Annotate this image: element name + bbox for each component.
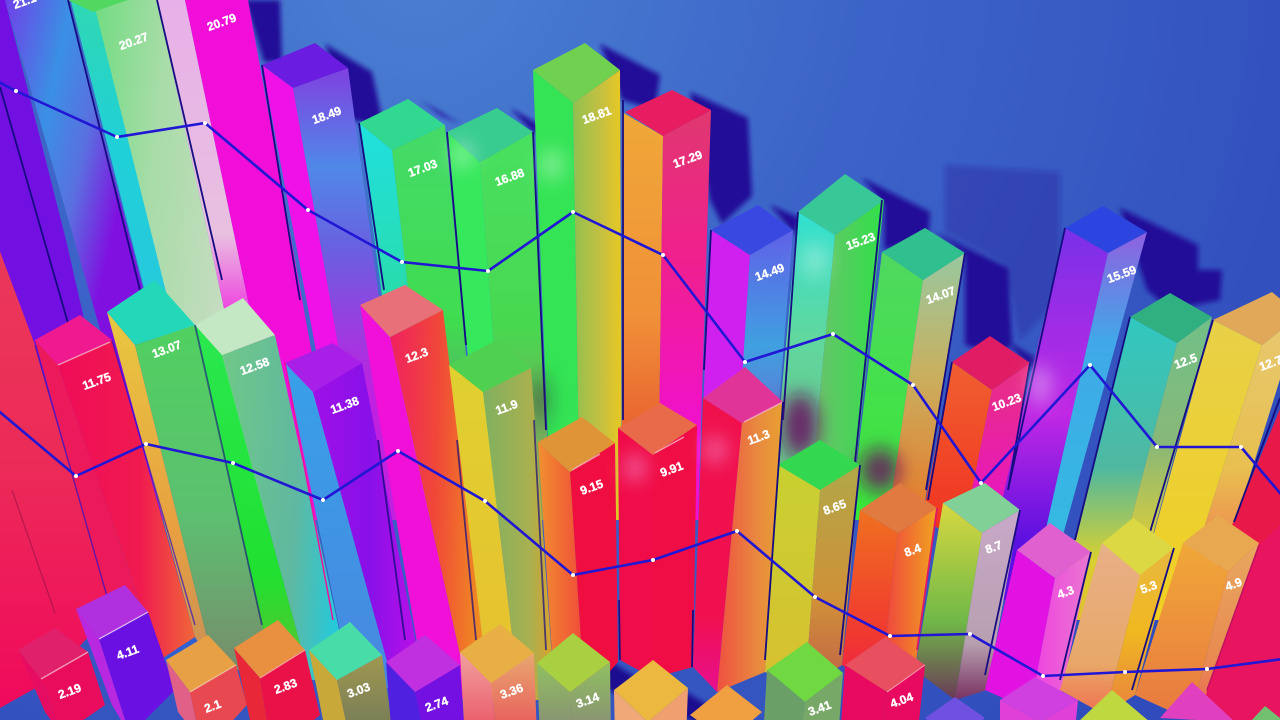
value label: 17.29	[671, 147, 704, 171]
bar 8.65	[765, 402, 860, 690]
bar 5.3	[1060, 518, 1174, 715]
value label: 15.59	[1105, 262, 1138, 286]
value label: 15.23	[844, 229, 877, 253]
value label: 5.3	[1138, 578, 1159, 597]
value label: 20.79	[205, 10, 238, 34]
value label: 4.04	[888, 690, 915, 711]
bar 8.7	[915, 483, 1020, 700]
bar 4.9	[1132, 515, 1259, 720]
bar 15.59	[979, 206, 1147, 600]
bar far right	[1200, 385, 1280, 620]
value label: 4.9	[1223, 575, 1244, 594]
front row of bars	[18, 585, 1280, 720]
value label: 11.75	[80, 370, 113, 393]
bar 3.14	[537, 633, 611, 720]
value label: 16.88	[493, 165, 526, 189]
bar lime small	[1078, 690, 1150, 720]
value label: 2.74	[423, 694, 450, 715]
bar 2.74	[386, 635, 465, 720]
value label: 3.14	[574, 690, 601, 711]
bar far right lower	[1200, 515, 1280, 720]
value label: 11.9	[494, 397, 520, 418]
value label: 18.81	[580, 103, 613, 127]
value label: 13.07	[150, 337, 183, 361]
value label: 3.36	[498, 681, 525, 702]
bar 11.38	[285, 343, 425, 690]
value label: 11.38	[328, 394, 361, 417]
value label: 4.3	[1055, 583, 1076, 602]
bar 18.49	[262, 43, 409, 520]
bar pink small	[1160, 682, 1235, 720]
bar 13.07	[107, 280, 272, 670]
bar 20.27	[68, 0, 270, 520]
bar 10.23	[922, 253, 1030, 540]
bar unlabelled orange	[614, 660, 688, 720]
far-left background bars	[0, 0, 130, 520]
bar left edge	[0, 225, 112, 715]
bar violet small	[925, 697, 985, 720]
value label: 2.83	[272, 676, 299, 697]
lower trend line	[0, 408, 1280, 678]
value label: 14.49	[753, 260, 786, 284]
value label: 9.91	[658, 459, 685, 480]
soft shadows and glows on back row	[450, 141, 1052, 492]
bar 2.83	[234, 620, 320, 720]
bar 14.07	[850, 200, 965, 520]
bar 4.11	[76, 585, 175, 720]
value label: 2.1	[202, 697, 223, 716]
bar 11.75	[35, 315, 198, 665]
bar 4.3	[985, 510, 1091, 710]
bar 2.19	[18, 628, 105, 720]
value label: 20.27	[117, 29, 150, 53]
bar 12.58	[195, 298, 350, 680]
bar 9.91	[618, 403, 697, 678]
middle row of bars	[0, 225, 1280, 720]
bar 17.03	[359, 99, 481, 520]
value label: 12.58	[238, 354, 271, 378]
bar magenta small	[1000, 677, 1078, 720]
bar 4.04	[840, 637, 925, 720]
bar 18.81	[533, 43, 622, 520]
bar 12.7	[1130, 292, 1280, 620]
value label: 4.11	[115, 642, 141, 663]
bar 8.4	[840, 465, 937, 690]
soft glows on middle row	[623, 436, 727, 482]
value label: 11.3	[746, 427, 772, 448]
bar 3.41	[763, 642, 843, 720]
value label: 8.7	[983, 538, 1004, 557]
value label: 10.23	[990, 390, 1023, 414]
value label: 12.3	[403, 345, 430, 366]
bar 16.88	[447, 108, 551, 520]
value label: 17.03	[406, 156, 439, 180]
bar orange small	[690, 685, 762, 720]
bar 3.36	[460, 624, 537, 720]
bar 21.x	[5, 0, 203, 520]
value label: 8.4	[902, 541, 923, 560]
value label: 2.19	[56, 681, 83, 702]
bar 11.9	[449, 340, 555, 700]
value label: 12.5	[1172, 351, 1199, 372]
value label: 8.65	[821, 497, 848, 518]
bar 2.1	[166, 635, 247, 720]
value label: 14.07	[924, 283, 957, 307]
value label: 3.41	[806, 698, 833, 719]
bar 3.03	[309, 622, 392, 720]
value label: 3.03	[345, 680, 372, 701]
value label: 18.49	[310, 103, 343, 127]
bar 14.49	[698, 205, 793, 520]
bar 17.29	[622, 90, 711, 520]
upper trend line	[0, 72, 1280, 505]
bar 12.5	[1055, 293, 1212, 620]
bar 20.79	[157, 0, 342, 520]
value label: 9.15	[578, 477, 605, 498]
bar 9.15	[534, 417, 618, 700]
bar 15.23	[770, 174, 884, 520]
cast shadows on floor	[245, 0, 1222, 720]
bar green small	[1250, 706, 1280, 720]
bar 12.3	[360, 285, 490, 700]
bar 11.3	[692, 367, 783, 692]
